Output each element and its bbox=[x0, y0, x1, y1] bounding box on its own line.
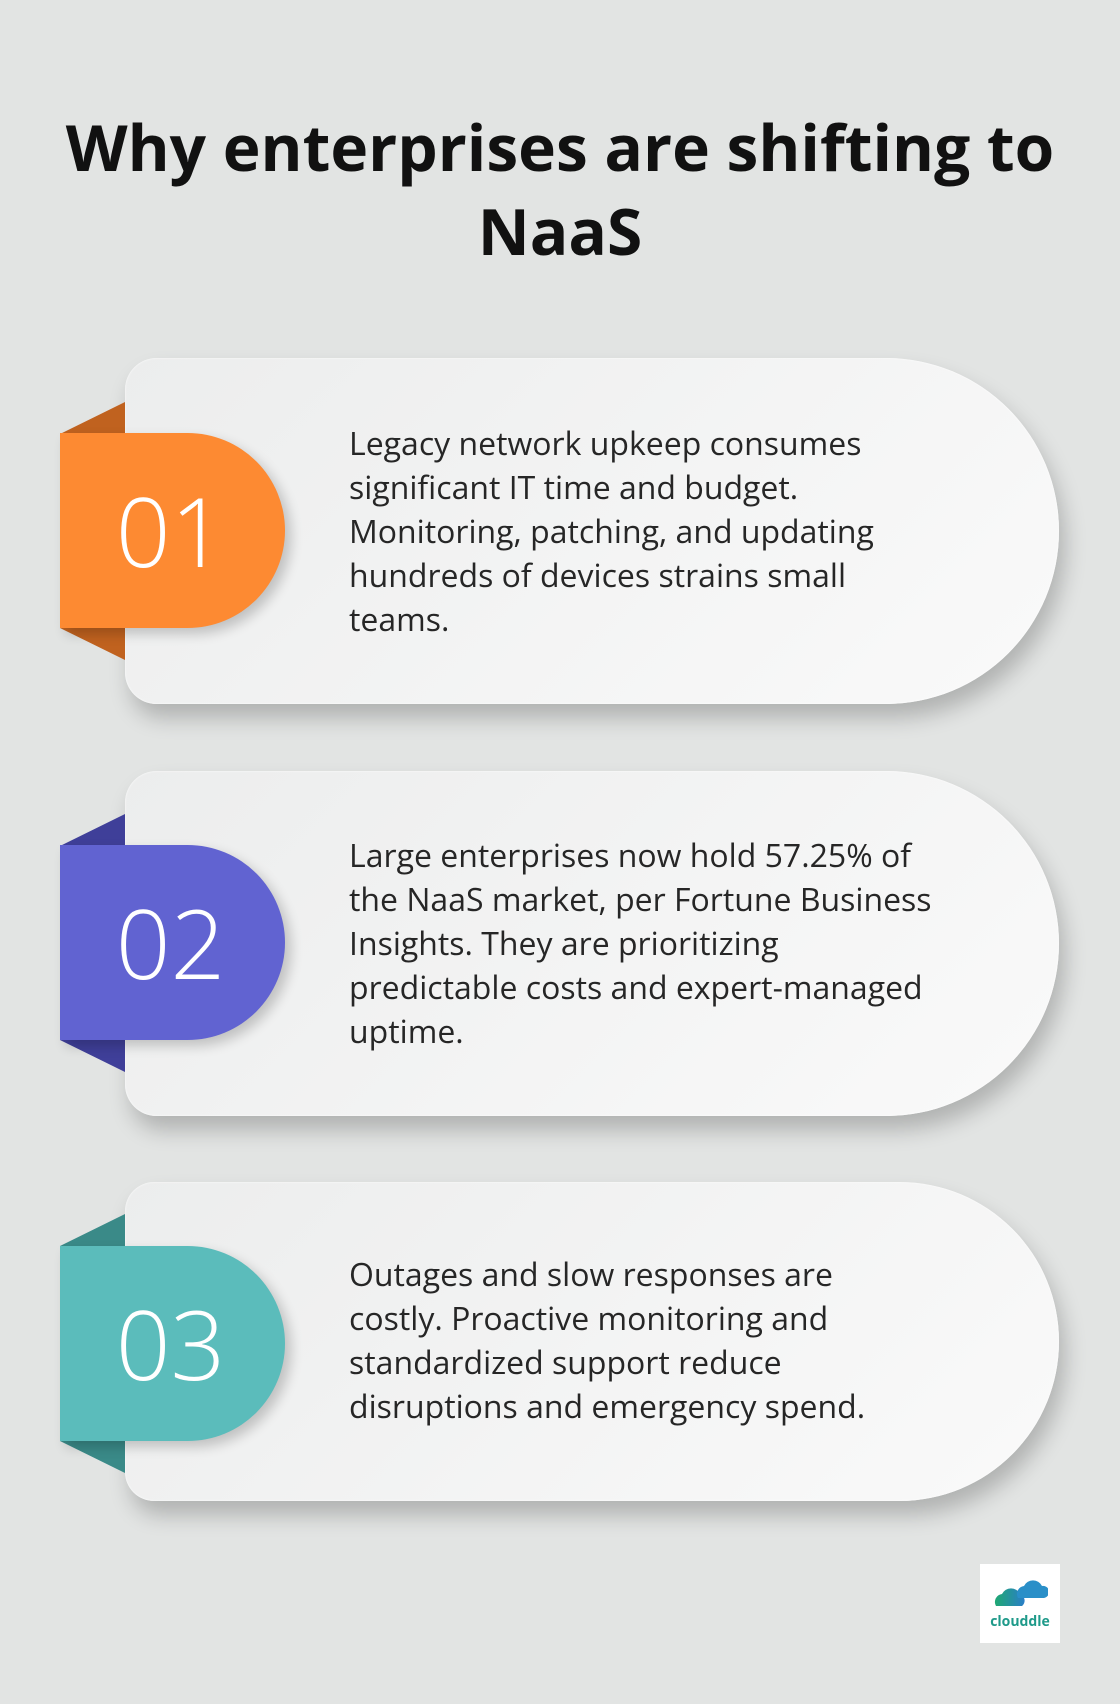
logo bbox=[980, 1564, 1060, 1643]
card 3 bbox=[125, 1182, 1059, 1501]
text 1: significant IT time and budget. bbox=[349, 466, 798, 509]
icon: clouds bbox=[994, 1580, 1048, 1606]
text 1: Legacy network upkeep consumes bbox=[349, 422, 862, 465]
badge 02: 02 bbox=[116, 877, 225, 1008]
text 1 bbox=[349, 422, 874, 641]
badge 01 bbox=[60, 433, 285, 628]
text 2: predictable costs and expert-managed bbox=[349, 966, 923, 1009]
title bbox=[66, 103, 1054, 274]
text 2 bbox=[349, 834, 932, 1053]
card 1 bbox=[125, 358, 1059, 704]
text 1: teams. bbox=[349, 598, 449, 641]
logo text: clouddle bbox=[990, 1612, 1050, 1631]
badge 02 bbox=[60, 845, 285, 1040]
text 1: hundreds of devices strains small bbox=[349, 554, 846, 597]
badge 01: 01 bbox=[116, 465, 225, 596]
badge 03 bbox=[60, 1246, 285, 1441]
text 1: Monitoring, patching, and updating bbox=[349, 510, 874, 553]
title: Why enterprises are shifting to bbox=[66, 103, 1054, 190]
fold bottom 3 bbox=[60, 1441, 125, 1473]
fold bottom 2 bbox=[60, 1040, 125, 1072]
text 2: Large enterprises now hold 57.25% of bbox=[349, 834, 911, 877]
text 2: the NaaS market, per Fortune Business bbox=[349, 878, 932, 921]
text 3: costly. Proactive monitoring and bbox=[349, 1297, 828, 1340]
item 1 bbox=[60, 358, 1075, 728]
fold top 2 bbox=[62, 814, 125, 845]
fold top 1 bbox=[62, 402, 125, 433]
text 3 bbox=[349, 1253, 865, 1428]
text 3: disruptions and emergency spend. bbox=[349, 1385, 865, 1428]
text 3: Outages and slow responses are bbox=[349, 1253, 833, 1296]
item 2 bbox=[60, 771, 1075, 1140]
card 2 bbox=[125, 771, 1059, 1116]
badge 03: 03 bbox=[116, 1278, 225, 1409]
fold top 3 bbox=[60, 1214, 125, 1246]
text 3: standardized support reduce bbox=[349, 1341, 782, 1384]
text 2: uptime. bbox=[349, 1010, 464, 1053]
fold bottom 1 bbox=[60, 628, 125, 660]
text 2: Insights. They are prioritizing bbox=[349, 922, 779, 965]
title: NaaS bbox=[478, 187, 642, 274]
